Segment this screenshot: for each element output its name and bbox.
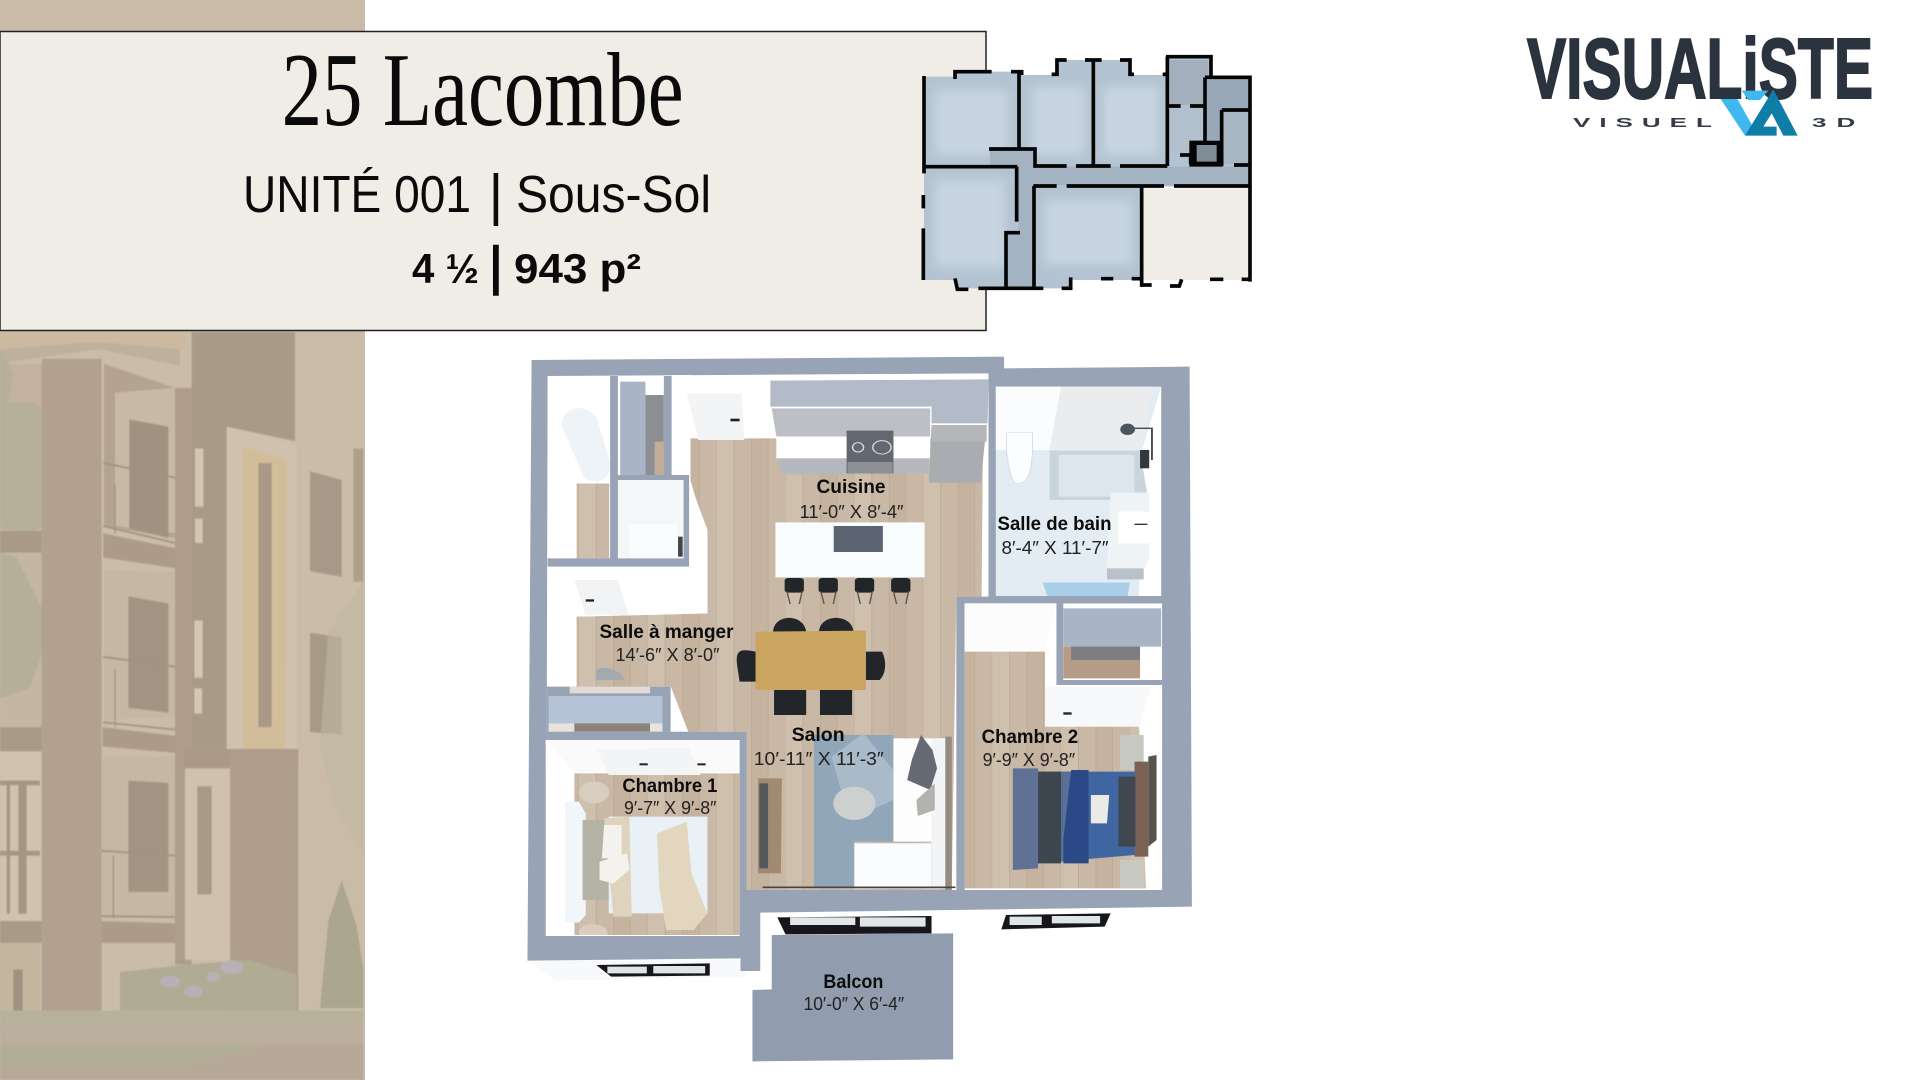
kitchen	[770, 379, 988, 423]
icon: logo mark	[1721, 89, 1798, 136]
wall slab	[527, 357, 1192, 971]
room label: Chambre 2: Chambre 2	[982, 727, 1078, 748]
room label: Chambre 1: 9′-7″ X 9′-8″	[624, 798, 717, 818]
room label: Chambre 2: 9′-9″ X 9′-8″	[983, 750, 1076, 770]
dining table	[737, 618, 885, 715]
closet 3	[617, 480, 684, 558]
floor plan	[527, 357, 1192, 1061]
room label: Chambre 1	[622, 776, 718, 818]
wood floors	[577, 438, 983, 890]
room label: Cuisine: Cuisine	[816, 477, 886, 498]
logo: Visualiste: 3D	[1812, 116, 1865, 130]
plan drawing	[527, 357, 1192, 1061]
logo: Visualiste: VISUEL	[1573, 116, 1721, 130]
room label: Chambre 1: Chambre 1	[622, 776, 718, 797]
inner walls	[548, 373, 996, 597]
windows	[777, 916, 932, 934]
unit line: Sous-Sol	[516, 166, 711, 224]
title panel	[0, 31, 986, 330]
interior white	[547, 373, 988, 890]
unit line: |	[488, 163, 503, 227]
room label: Balcon: 10′-0″ X 6′-4″	[804, 994, 905, 1014]
sofa	[854, 738, 945, 888]
room label: Cuisine	[800, 477, 904, 522]
title: 25 Lacombe: 25 Lacombe	[282, 31, 684, 148]
front white faces	[527, 907, 1192, 990]
stools	[785, 578, 910, 593]
chamber 2	[965, 603, 1162, 890]
rug	[814, 735, 893, 887]
room label: Balcon: Balcon	[823, 972, 883, 993]
unit line: UNITÉ 001	[243, 166, 471, 224]
closet 2	[618, 376, 664, 475]
bathroom	[996, 387, 1161, 596]
water heater	[561, 408, 610, 482]
living room: console and TV	[758, 778, 782, 873]
room label: Salon: Salon	[792, 725, 845, 746]
size line	[412, 237, 641, 296]
chamber 1	[546, 740, 740, 936]
room label: Salle de bain: Salle de bain	[998, 514, 1112, 535]
room label: Salle à manger: 14′-6″ X 8′-0″	[616, 645, 720, 665]
room label: Salle de bain	[998, 514, 1112, 558]
room label: Balcon	[804, 972, 905, 1014]
room label: Salon: 10′-11″ X 11′-3″	[754, 749, 884, 769]
room label: Salle à manger: Salle à manger	[600, 622, 734, 643]
key plan	[923, 57, 1250, 289]
white wall faces	[548, 480, 707, 617]
size line: 943 p²	[514, 245, 641, 292]
island	[775, 522, 925, 577]
size line: 4 ½	[412, 245, 479, 292]
room label: Salle à manger	[600, 622, 734, 665]
room label: Chambre 2	[982, 727, 1078, 770]
background building panel	[0, 0, 365, 1080]
size line: |	[489, 237, 503, 296]
room label: Salon	[754, 725, 884, 769]
room label: Cuisine: 11′-0″ X 8′-4″	[800, 502, 904, 522]
unit line	[243, 163, 711, 227]
balcony slab	[752, 933, 953, 1061]
room label: Salle de bain: 8′-4″ X 11′-7″	[1002, 538, 1109, 558]
